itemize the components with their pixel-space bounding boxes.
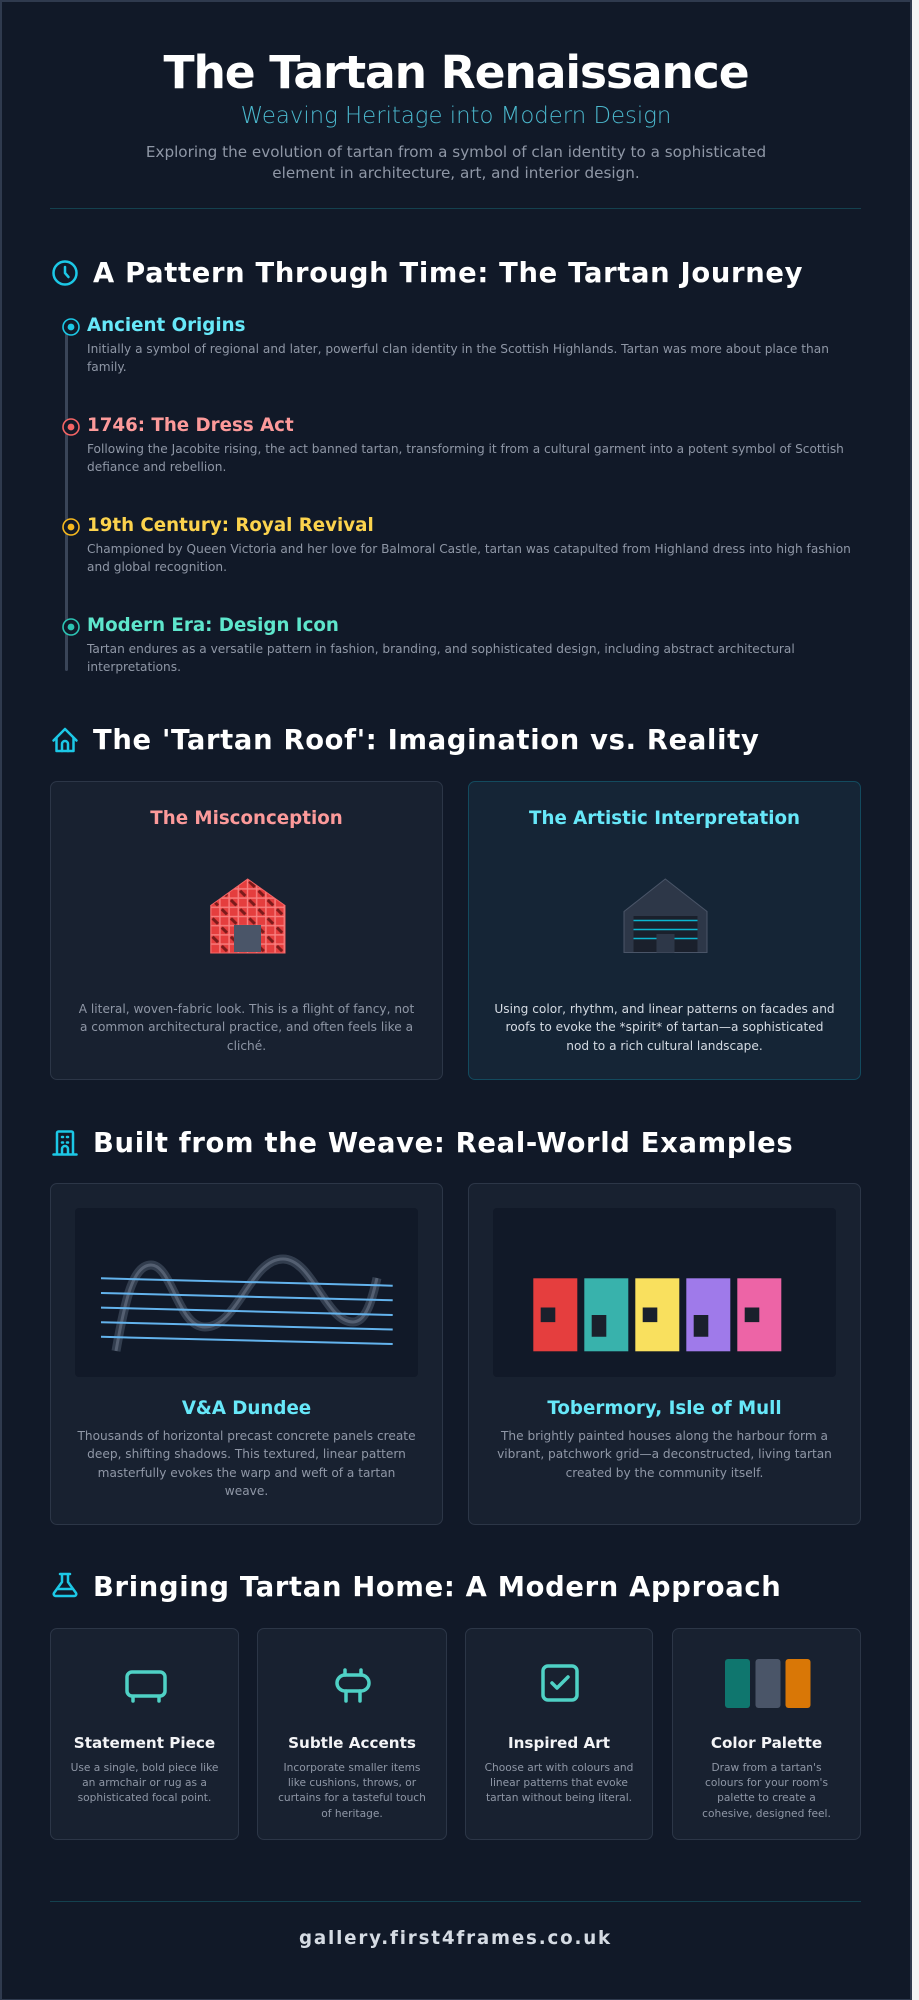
panel text (78, 1002, 414, 1053)
panel text: roofs to evoke the *spirit* of tartan—a sophisticated (506, 1020, 823, 1034)
panel heading: The Misconception (150, 808, 343, 829)
icon: armchair (125, 1670, 167, 1703)
illustration: linear facade house (624, 878, 708, 953)
card text (71, 1761, 218, 1804)
card text: Use a single, bold piece like (71, 1761, 218, 1774)
heading text: Bringing Tartan Home: A Modern Approach (93, 1572, 781, 1603)
header divider (50, 208, 861, 209)
panel text: Using color, rhythm, and linear patterns on facades and (494, 1002, 835, 1016)
icon: house (52, 728, 78, 752)
heading text: Built from the Weave: Real-World Examples (93, 1128, 793, 1159)
card text: tartan without being literal. (486, 1791, 632, 1804)
card text: like cushions, throws, or (288, 1776, 416, 1789)
card text: of heritage. (321, 1807, 383, 1820)
card text: curtains for a tasteful touch (278, 1791, 426, 1804)
panel: artistic interpretation (468, 781, 861, 1080)
example text: masterfully evokes the warp and weft of a tartan (98, 1466, 395, 1480)
intro text: Exploring the evolution of tartan from a symbol of clan identity to a sophisticated (146, 143, 766, 161)
item text: Tartan endures as a versatile pattern in fashion, branding, and sophisticated design, including abstract architectural (87, 642, 795, 656)
example text (497, 1429, 832, 1480)
card text: Choose art with colours and (485, 1761, 633, 1774)
panel text (494, 1002, 835, 1053)
example text (77, 1429, 416, 1498)
timeline item: modern era (62, 615, 795, 674)
item text: defiance and rebellion. (87, 460, 226, 474)
card text: sophisticated focal point. (78, 1791, 211, 1804)
card text: palette to create a (717, 1791, 816, 1804)
item text: Championed by Queen Victoria and her love for Balmoral Castle, tartan was catapulted from Highland dress into high fashion (87, 542, 851, 556)
footer link text: gallery.first4frames.co.uk (299, 1928, 612, 1949)
subtitle: Weaving Heritage into Modern Design (241, 103, 671, 129)
example text: vibrant, patchwork grid—a deconstructed, living tartan (497, 1447, 832, 1461)
item text (87, 542, 851, 574)
panel: misconception (50, 781, 443, 1080)
example text: Thousands of horizontal precast concrete panels create (77, 1429, 416, 1443)
example title: V&A Dundee (182, 1398, 311, 1419)
panel: subtle accents (257, 1628, 447, 1840)
card title: Color Palette (711, 1734, 822, 1752)
icon: flask (52, 1572, 78, 1598)
section heading: tartan roof (52, 725, 759, 756)
timeline item: royal revival (62, 515, 851, 574)
example text: The brightly painted houses along the harbour form a (501, 1429, 828, 1443)
marker (62, 418, 80, 436)
section heading: home (52, 1572, 781, 1603)
card text: Draw from a tartan's (711, 1761, 822, 1774)
card text: cohesive, designed feel. (702, 1807, 831, 1820)
panel: V&A Dundee (50, 1183, 443, 1525)
timeline item: ancient origins (62, 315, 829, 374)
illustration: tartan fabric house (210, 878, 286, 954)
marker (62, 518, 80, 536)
section heading: examples (52, 1128, 793, 1159)
timeline rail (65, 327, 68, 671)
item text (87, 442, 844, 474)
card title: Statement Piece (74, 1734, 215, 1752)
card title: Inspired Art (508, 1734, 610, 1752)
item text (86, 642, 795, 674)
panel text: A literal, woven-fabric look. This is a flight of fancy, not (79, 1002, 414, 1016)
icon: framed check (541, 1664, 579, 1702)
card text (485, 1761, 633, 1804)
item text: interpretations. (87, 660, 181, 674)
item text: Following the Jacobite rising, the act banned tartan, transforming it from a cultural garment into a potent symbol of Scottish (87, 442, 844, 456)
intro text: element in architecture, art, and interior design. (272, 164, 640, 182)
panel heading: The Artistic Interpretation (529, 808, 800, 829)
item text: family. (87, 360, 127, 374)
icon: cushion (335, 1668, 371, 1703)
section heading: timeline (52, 258, 803, 289)
card text: an armchair or rug as a (82, 1776, 207, 1789)
icon: building (52, 1130, 78, 1156)
item text: and global recognition. (87, 560, 227, 574)
panel text: a common architectural practice, and often feels like a (80, 1020, 413, 1034)
item title: 19th Century: Royal Revival (87, 515, 374, 536)
panel: color palette (672, 1628, 861, 1840)
title: The Tartan Renaissance (164, 46, 748, 99)
example title: Tobermory, Isle of Mull (547, 1398, 782, 1419)
panel text: cliché. (227, 1039, 266, 1053)
example text: created by the community itself. (566, 1466, 763, 1480)
item title: Modern Era: Design Icon (87, 615, 339, 636)
example text: deep, shifting shadows. This textured, linear pattern (87, 1447, 406, 1461)
illustration: V&A wave and lines (76, 1208, 418, 1376)
icon: palette swatches (725, 1659, 810, 1708)
card text: colours for your room's (705, 1776, 828, 1789)
marker (62, 618, 80, 636)
panel: Tobermory (468, 1183, 861, 1525)
card title: Subtle Accents (288, 1734, 416, 1752)
card text: Incorporate smaller items (284, 1761, 420, 1774)
panel: inspired art (465, 1628, 653, 1840)
header (50, 46, 861, 209)
item text: Initially a symbol of regional and later, powerful clan identity in the Scottish Highlands. Tartan was more about place than (87, 342, 829, 356)
illustration: coloured houses (494, 1208, 836, 1376)
card text (278, 1761, 426, 1820)
heading text: The 'Tartan Roof': Imagination vs. Reality (93, 725, 759, 756)
heading text: A Pattern Through Time: The Tartan Journey (93, 258, 803, 289)
marker (62, 318, 80, 336)
item text (87, 342, 829, 374)
item title: Ancient Origins (87, 315, 245, 336)
item title: 1746: The Dress Act (87, 415, 294, 436)
card text: linear patterns that evoke (490, 1776, 628, 1789)
footer divider (50, 1901, 861, 1902)
timeline item: dress act (62, 415, 844, 474)
intro text (146, 143, 766, 182)
panel: statement piece (50, 1628, 239, 1840)
timeline (62, 315, 851, 674)
panel text: nod to a rich cultural landscape. (566, 1039, 763, 1053)
example text: weave. (225, 1484, 268, 1498)
card text (702, 1761, 831, 1820)
icon: clock (52, 260, 78, 286)
